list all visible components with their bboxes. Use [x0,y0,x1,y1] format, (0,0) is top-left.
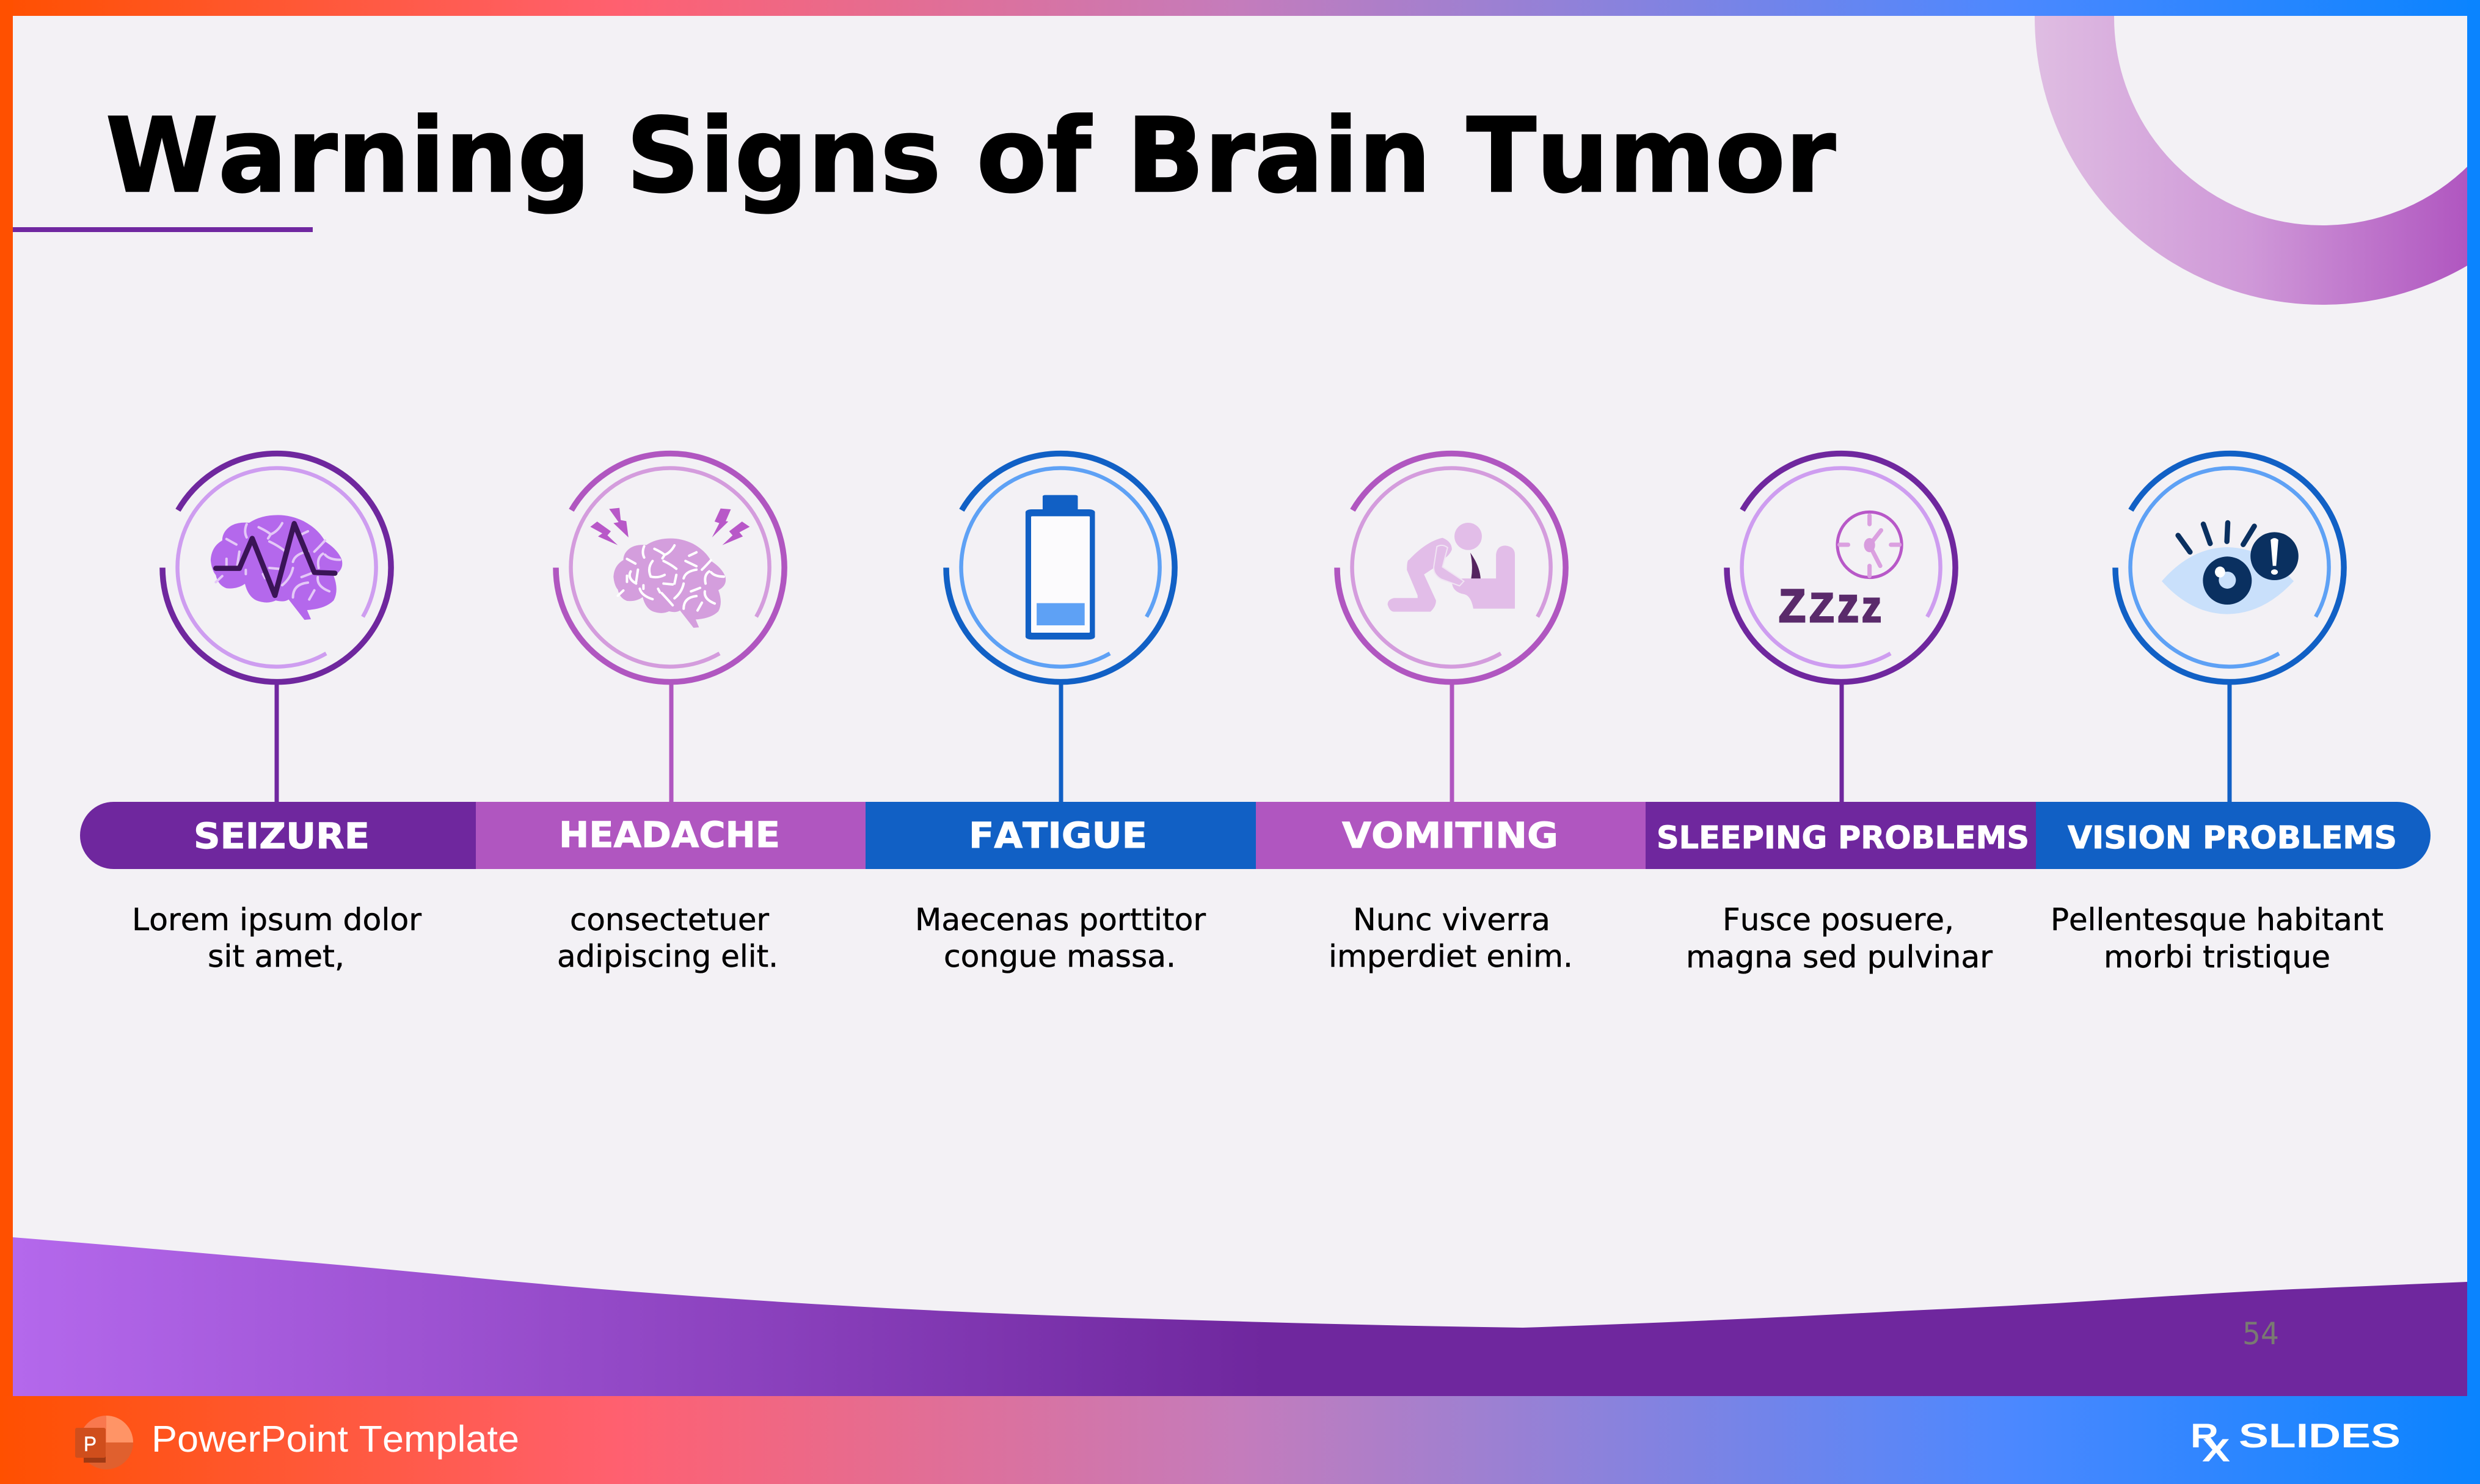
icon: brain with lightning bolts [590,508,749,628]
right edge bar [2467,0,2480,1484]
column 3: fatigue icon [946,454,1175,802]
column 4: vomiting icon [1337,454,1566,802]
text block: headache: consectetuer [570,902,769,937]
column 1: seizure icon [162,454,391,802]
title: Warning Signs of Brain Tumor [106,96,1836,216]
text block: fatigue: Maecenas porttitor [915,902,1206,937]
icon: Zzzz letters: z [1862,583,1881,631]
column 6: vision problems icon [2115,454,2344,802]
icon: Zzzz letters: z [1837,578,1859,633]
text block: vomiting [1329,902,1573,974]
icon: Zzzz letters [1779,578,1881,633]
label bar: seizure [80,802,476,869]
logo: Rx Slides [2190,1416,2401,1469]
icon: PowerPoint logo [75,1416,133,1469]
text block: seizure [132,902,421,974]
footer gradient bar [0,1396,2480,1484]
icon: low battery [1026,495,1095,639]
text block: headache [557,902,778,974]
icon: person vomiting into toilet [1388,523,1515,612]
icon: PowerPoint logo: P [84,1433,97,1456]
label bar: headache: HEADACHE [559,814,780,856]
text block: seizure: Lorem ipsum dolor [132,902,421,937]
logo: Rx Slides: X [2202,1433,2230,1469]
label bar: sleeping problems [1646,802,2036,869]
icon: Zzzz letters: Z [1779,580,1806,632]
text block: vision problems: morbi tristique [2104,939,2330,975]
page number: 54 [2242,1316,2279,1351]
icon: brain with pulse [211,515,342,620]
label bar: vision problems [2036,802,2431,869]
left edge bar [0,0,13,1484]
text block: fatigue: congue massa. [944,939,1176,974]
text block: sleeping problems [1686,902,1993,975]
label bar: vomiting: VOMITING [1342,815,1558,856]
text block: sleeping problems: magna sed pulvinar [1686,939,1993,975]
label bar: seizure: SEIZURE [194,815,370,857]
label bar: fatigue [866,802,1256,869]
bottom purple wave [13,1237,2467,1399]
label bar: fatigue: FATIGUE [969,815,1147,856]
text block: vision problems: Pellentesque habitant [2051,902,2383,937]
label bar: sleeping problems: SLEEPING PROBLEMS [1657,820,2029,856]
text block: headache: adipiscing elit. [557,939,778,974]
top gradient bar [0,0,2480,16]
decorative corner ring [2074,0,2480,265]
text block: sleeping problems: Fusce posuere, [1723,902,1954,937]
column 2: headache icon [556,454,784,802]
text block: vomiting: imperdiet enim. [1329,939,1573,974]
label bar: vomiting [1256,802,1646,869]
footer text: PowerPoint Template [151,1418,519,1460]
icon: eye with alert [2162,523,2299,614]
column 5: sleeping problems icon [1727,454,1955,802]
icon: Zzzz letters: Z [1809,585,1834,631]
logo: Rx Slides: R [2190,1416,2219,1455]
title underline [13,227,313,232]
label bar: headache [476,802,866,869]
logo: Rx Slides: SLIDES [2239,1416,2401,1455]
text block: vision problems [2051,902,2383,975]
icon: clock [1837,512,1902,578]
text block: fatigue [915,902,1206,974]
label bar: vision problems: VISION PROBLEMS [2068,820,2397,856]
text block: vomiting: Nunc viverra [1353,902,1550,937]
text block: seizure: sit amet, [208,939,345,974]
